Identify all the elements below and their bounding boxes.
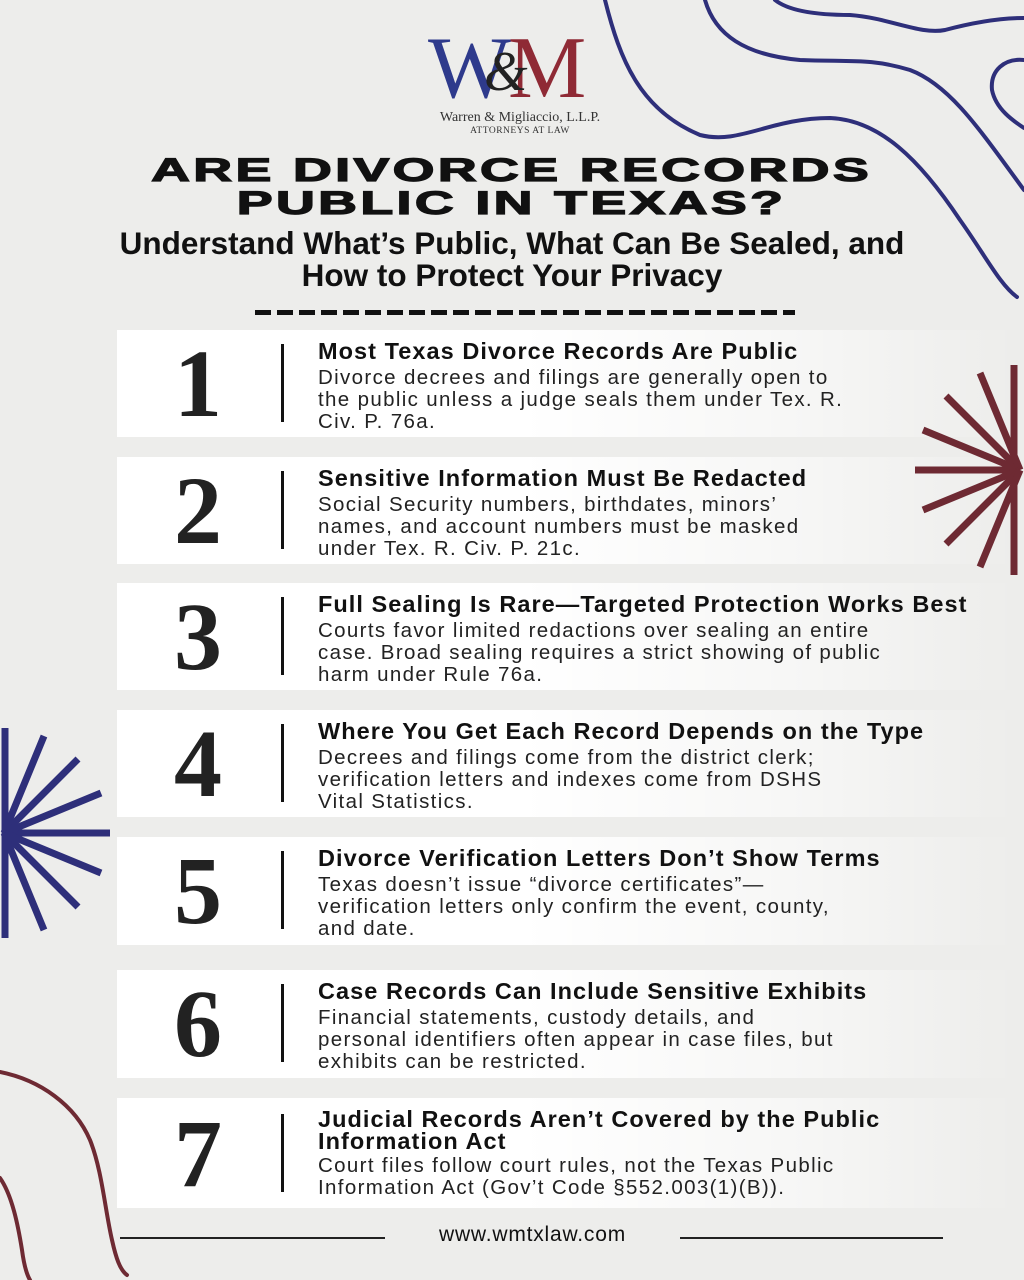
card 6: Case Records Can Include Sensitive Exhibits <box>318 978 867 1004</box>
title: ARE DIVORCE RECORDS <box>152 152 872 188</box>
card 4: Where You Get Each Record Depends on the Type <box>318 718 924 744</box>
card 5: and date. <box>318 917 416 940</box>
card 7: 7 <box>174 1100 222 1207</box>
icon: red starburst <box>915 365 1020 575</box>
logo: ATTORNEYS AT LAW <box>470 126 570 136</box>
card 2 <box>117 457 1017 564</box>
card 6: Financial statements, custody details, and <box>318 1006 755 1029</box>
dashed divider <box>255 310 795 315</box>
card 2: under Tex. R. Civ. P. 21c. <box>318 537 581 560</box>
card 2: 2 <box>174 457 222 564</box>
logo: M <box>508 20 586 117</box>
card 4: 4 <box>174 710 222 817</box>
icon: blue starburst <box>4 728 110 938</box>
card 5 <box>117 837 1017 945</box>
card 1: Most Texas Divorce Records Are Public <box>318 338 798 364</box>
card 5: Texas doesn’t issue “divorce certificates”— <box>318 873 765 896</box>
title <box>151 152 872 221</box>
card 2: Sensitive Information Must Be Redacted <box>318 465 807 491</box>
card 6: personal identifiers often appear in case files, but <box>318 1028 834 1051</box>
footer: www.wmtxlaw.com <box>439 1223 626 1246</box>
logo: W <box>428 20 507 117</box>
card 6 <box>117 970 1017 1078</box>
card 7 <box>117 1098 1017 1208</box>
subtitle: Understand What’s Public, What Can Be Sealed, and <box>120 225 904 261</box>
card 5: 5 <box>174 837 222 944</box>
card 3: 3 <box>174 583 222 690</box>
card 3: Full Sealing Is Rare—Targeted Protection Works Best <box>318 591 967 617</box>
card 4: Vital Statistics. <box>318 790 474 813</box>
card 1: the public unless a judge seals them under Tex. R. <box>318 388 843 411</box>
card 7: Judicial Records Aren’t Covered by the Public <box>318 1106 880 1132</box>
logo: & <box>484 41 528 103</box>
card 4 <box>117 710 1017 817</box>
card 6: 6 <box>174 970 222 1077</box>
card 3: harm under Rule 76a. <box>318 663 543 686</box>
card 2: names, and account numbers must be masked <box>318 515 800 538</box>
card 5: verification letters only confirm the event, county, <box>318 895 830 918</box>
title: PUBLIC IN TEXAS? <box>237 185 787 221</box>
card 1: Divorce decrees and filings are generally open to <box>318 366 829 389</box>
card 4: verification letters and indexes come from DSHS <box>318 768 822 791</box>
card 7: Information Act (Gov’t Code §552.003(1)(B)). <box>318 1176 785 1199</box>
card 2: Social Security numbers, birthdates, minors’ <box>318 493 777 516</box>
card 3: Courts favor limited redactions over sealing an entire <box>318 619 869 642</box>
card 3: case. Broad sealing requires a strict showing of public <box>318 641 881 664</box>
card 3 <box>117 583 1017 690</box>
card 1: 1 <box>174 330 222 437</box>
card 1 <box>117 330 1017 437</box>
card 1: Civ. P. 76a. <box>318 410 436 433</box>
card 7: Court files follow court rules, not the Texas Public <box>318 1154 834 1177</box>
logo: Warren & Migliaccio, L.L.P. <box>440 110 600 125</box>
subtitle <box>120 225 904 293</box>
card 6: exhibits can be restricted. <box>318 1050 587 1073</box>
card 5: Divorce Verification Letters Don’t Show Terms <box>318 845 881 871</box>
subtitle: How to Protect Your Privacy <box>302 257 722 293</box>
logo <box>428 20 600 136</box>
card 4: Decrees and filings come from the district clerk; <box>318 746 815 769</box>
card 7: Information Act <box>318 1128 507 1154</box>
